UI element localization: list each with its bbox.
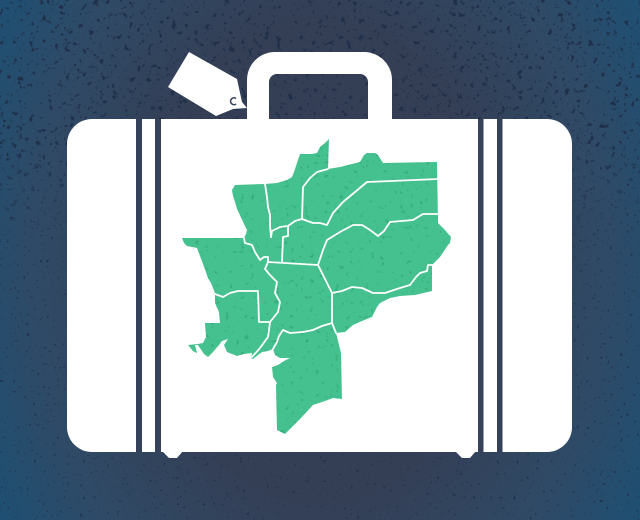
map fill [182,139,451,434]
icon: luggage tag [168,52,247,116]
map texture [182,144,444,433]
suitcase body [67,119,572,458]
foot: left [162,451,183,458]
region borders [215,169,438,357]
suitcase handle [247,52,392,125]
straps: left [136,119,161,452]
map: regions [182,139,451,434]
straps: right [478,119,502,452]
foot: right [455,451,476,458]
